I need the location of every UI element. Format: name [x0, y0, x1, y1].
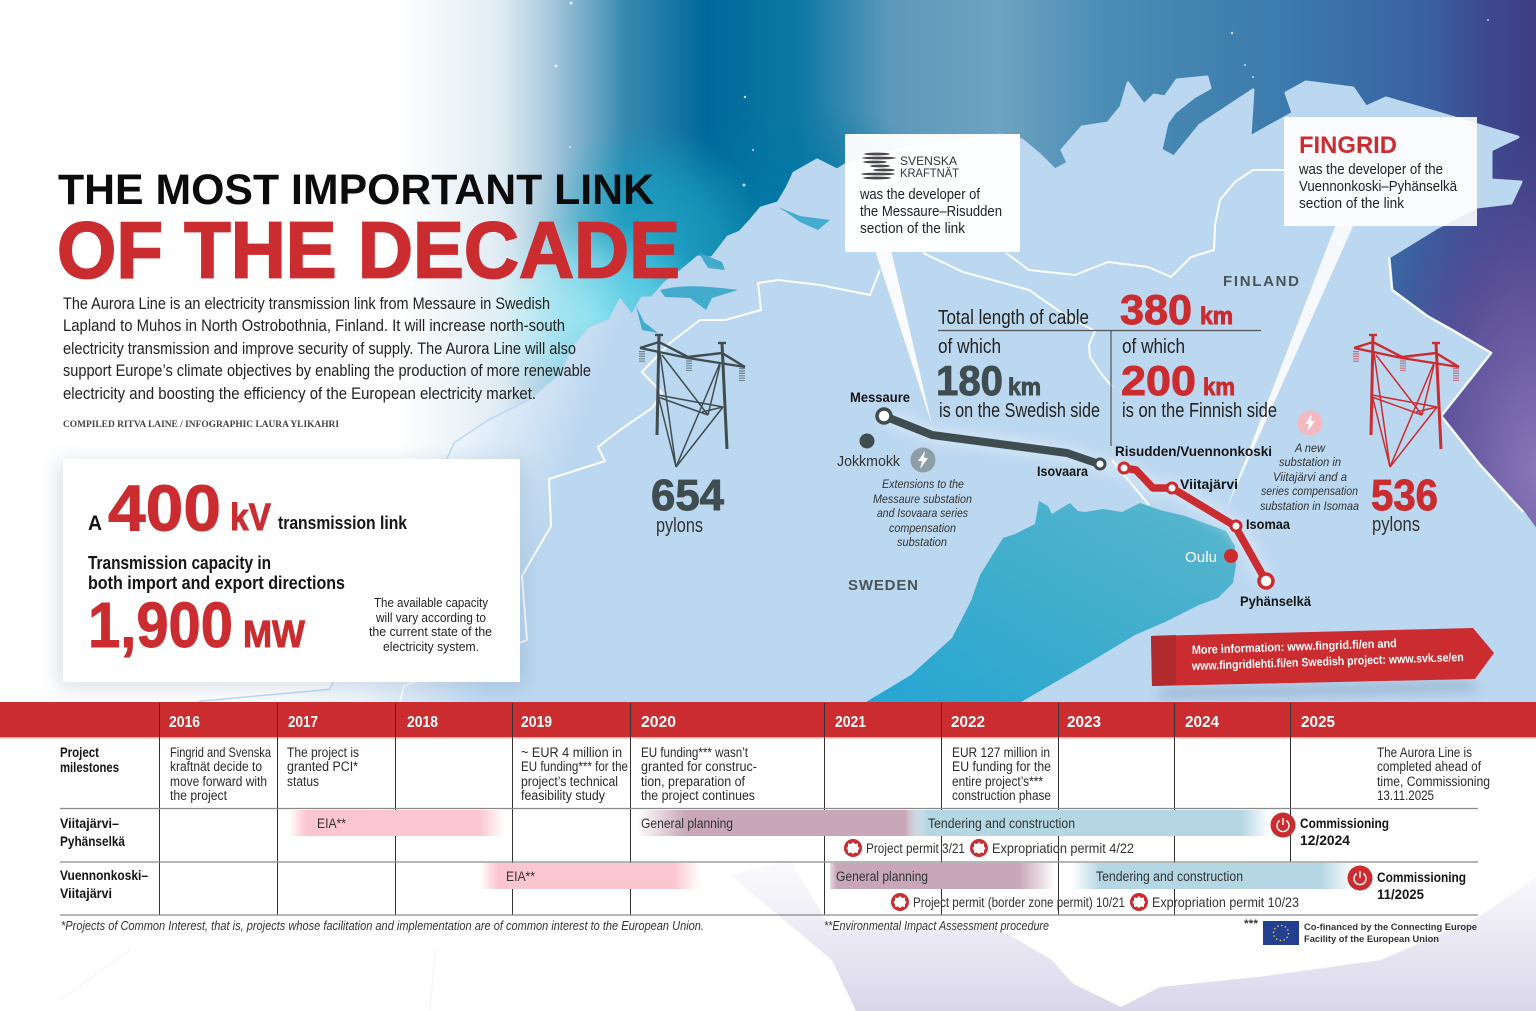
map: fjords: [636, 207, 830, 333]
timeline: row labels: Viitajärvi: [60, 885, 112, 901]
map: borders: [400, 170, 1523, 702]
milestones 2016: Fingrid and Svenska: [170, 745, 271, 760]
EU co-financing note: Co-financed by the Connecting Europe: [1304, 922, 1477, 933]
EU co-financing note: [1244, 918, 1477, 945]
map: land fade: [200, 298, 700, 702]
milestones 2016: the project: [170, 788, 227, 803]
intro text: electricity transmission and improve security of supply. The Aurora Line will also: [63, 340, 576, 358]
panel: key figures: 400: [108, 472, 221, 544]
commissioning: 11/2025: [1348, 866, 1466, 902]
cable length stats: km: [1203, 374, 1235, 401]
milestones 2020: granted for construc-: [641, 759, 757, 774]
icon: Finnish substation bolt: [1298, 410, 1322, 436]
panel: key figures: will vary according to: [375, 610, 486, 625]
milestones 2020: EU funding*** wasn’t: [641, 745, 748, 760]
logo: Svenska Kraftnät: SVENSKA: [900, 154, 957, 168]
panel: key figures: A: [88, 512, 102, 535]
milestones 2019: [521, 745, 628, 803]
commissioning: 11/2025: 11/2025: [1377, 886, 1424, 902]
map place names: Messaure: [850, 389, 910, 405]
map place names: Viitajärvi: [1180, 476, 1238, 492]
timeline: year header: 2022: [951, 714, 985, 731]
credit line: COMPILED RITVA LAINE / INFOGRAPHIC LAURA YLIKAHRI: [63, 420, 339, 430]
panel: key figures: kV: [230, 497, 272, 539]
milestones 2022: [952, 745, 1051, 803]
milestones 2019: project’s technical: [521, 774, 618, 789]
map place names: Oulu: [1185, 549, 1217, 566]
permits: Viitajärvi–Pyhänselkä: [844, 839, 1134, 857]
milestones 2017: status: [287, 774, 319, 789]
milestones 2025: 13.11.2025: [1377, 788, 1434, 803]
timeline: year header: 2021: [835, 714, 866, 731]
commissioning: 11/2025: Commissioning: [1377, 869, 1466, 885]
timeline: year header: 2025: [1301, 714, 1335, 731]
milestones 2022: EUR 127 million in: [952, 745, 1050, 760]
intro text: Lapland to Muhos in North Ostrobothnia, Finland. It will increase north-south: [63, 317, 565, 335]
EU co-financing note: ***: [1244, 918, 1259, 930]
panel: key figures: both import and export directions: [88, 573, 345, 593]
timeline: row labels: [60, 744, 148, 901]
cable length stats: km: [1200, 303, 1233, 330]
milestones 2025: The Aurora Line is: [1377, 745, 1472, 760]
note: Finnish substations: [1260, 441, 1359, 513]
note: Swedish substations: Messaure substation: [873, 492, 972, 506]
milestones 2019: ~ EUR 4 million in: [521, 745, 622, 760]
panel: key figures: transmission link: [278, 512, 408, 533]
callout: Fingrid: [1284, 117, 1477, 226]
commissioning: 12/2024: Commissioning: [1300, 815, 1389, 831]
panel: key figures: 1,900: [88, 589, 233, 661]
timeline: year header: 2020: [641, 714, 676, 731]
icon: Swedish pylon: [640, 335, 745, 467]
footnote: EIA: **Environmental Impact Assessment procedure: [824, 919, 1049, 933]
intro text: support Europe’s climate objectives by enabling the production of more renewable: [63, 362, 591, 380]
callout: Fingrid: Vuennonkoski–Pyhänselkä: [1299, 178, 1458, 195]
title: THE MOST IMPORTANT LINK: [58, 166, 654, 214]
stat: Finnish pylons: 536: [1371, 471, 1438, 520]
milestones 2025: completed ahead of: [1377, 759, 1481, 774]
commissioning: 12/2024: [1270, 812, 1389, 848]
cable length stats: is on the Finnish side: [1122, 400, 1277, 422]
logo: Svenska Kraftnät: [861, 153, 960, 180]
permits: Viitajärvi–Pyhänselkä: Expropriation permit 4/22: [992, 841, 1134, 856]
map: Gulf of Bothnia: [866, 501, 1236, 702]
intro text: [63, 295, 591, 403]
cable length stats: of which: [938, 336, 1001, 358]
permits: Viitajärvi–Pyhänselkä: Project permit 3/21: [866, 841, 965, 856]
route: Swedish section: [877, 409, 1105, 469]
milestones 2020: [641, 745, 757, 803]
note: Swedish substations: compensation: [889, 521, 956, 535]
Gantt: Viitajärvi–Pyhänselkä: Tendering and construction: [928, 816, 1075, 831]
cable length stats: 200: [1121, 357, 1196, 404]
timeline: year header: 2017: [288, 714, 318, 731]
map place names: Isovaara: [1037, 463, 1088, 479]
note: Finnish substations: substation in Isomaa: [1260, 499, 1359, 513]
note: Finnish substations: A new: [1294, 441, 1326, 455]
milestones 2019: feasibility study: [521, 788, 605, 803]
cable length stats: Total length of cable: [938, 307, 1089, 329]
ribbon: more information: More information: www.fingrid.fi/en and: [1192, 636, 1397, 657]
timeline: year header: 2016: [169, 714, 200, 731]
note: Finnish substations: substation in: [1279, 455, 1341, 469]
milestones 2025: time, Commissioning: [1377, 774, 1490, 789]
callout: Fingrid: section of the link: [1299, 195, 1404, 212]
map place names: Isomaa: [1246, 516, 1290, 532]
Gantt: Vuennonkoski–Viitajärvi: EIA**: [506, 869, 536, 884]
timeline: year header: 2023: [1067, 714, 1101, 731]
commissioning: 12/2024: 12/2024: [1300, 832, 1350, 848]
milestones 2017: [287, 745, 359, 789]
stat: Swedish pylons: pylons: [656, 515, 703, 537]
timeline: row labels: milestones: [60, 759, 119, 775]
permits: Vuennonkoski–Viitajärvi: Expropriation permit 10/23: [1152, 895, 1299, 910]
milestones 2017: granted PCI*: [287, 759, 359, 774]
panel: key figures: Transmission capacity in: [88, 553, 271, 573]
milestones 2016: move forward with: [170, 774, 267, 789]
note: Swedish substations: Extensions to the: [882, 477, 964, 491]
map place names: Pyhänselkä: [1240, 593, 1311, 609]
icon: EU flag: [1263, 921, 1299, 945]
ribbon: more information: www.fingridlehti.fi/en Swedish project: www.svk.se/en: [1191, 650, 1464, 673]
Gantt: Viitajärvi–Pyhänselkä: EIA**: [317, 816, 347, 831]
milestones 2019: EU funding*** for the: [521, 759, 628, 774]
logo: Svenska Kraftnät: KRAFTNÄT: [900, 166, 960, 180]
cable length stats: of which: [1122, 336, 1185, 358]
callout: Svenska Kraftnät: section of the link: [860, 220, 965, 237]
title: OF THE DECADE: [57, 206, 680, 294]
cable length stats: 180: [936, 357, 1003, 404]
map label: Sweden: SWEDEN: [848, 577, 918, 594]
panel: key figures: the current state of the: [369, 624, 492, 639]
cable length stats: 380: [1120, 286, 1192, 333]
timeline: row labels: Project: [60, 744, 99, 760]
route: Finnish section: [1119, 463, 1273, 588]
Gantt: Vuennonkoski–Viitajärvi: General planning: [836, 869, 928, 884]
panel: key figures: electricity system.: [383, 639, 479, 654]
Gantt: Vuennonkoski–Viitajärvi: Tendering and construction: [1096, 869, 1243, 884]
title: [57, 166, 680, 294]
cable length stats: km: [1008, 374, 1041, 401]
panel: key figures: [58, 459, 526, 688]
callout: Svenska Kraftnät: the Messaure–Risudden: [860, 203, 1002, 220]
Gantt: Viitajärvi–Pyhänselkä: [289, 810, 1270, 836]
callout: Fingrid: was the developer of the: [1298, 161, 1443, 178]
timeline: year header: [0, 702, 1536, 738]
timeline: row labels: Vuennonkoski–: [60, 867, 148, 883]
milestones 2022: entire project’s***: [952, 774, 1044, 789]
note: Swedish substations: and Isovaara series: [877, 506, 968, 520]
milestones 2025: [1377, 745, 1490, 803]
timeline: year header: 2024: [1185, 714, 1219, 731]
timeline: year header: 2019: [521, 714, 552, 731]
EU co-financing note: Facility of the European Union: [1304, 934, 1439, 945]
stat: Swedish pylons: 654: [651, 471, 725, 520]
permits: Vuennonkoski–Viitajärvi: Project permit (border zone permit) 10/21: [913, 895, 1125, 910]
map label: Finland: FINLAND: [1223, 273, 1299, 290]
map place names: [837, 389, 1311, 609]
cable length stats: [936, 286, 1277, 446]
map: land: [200, 77, 1536, 702]
milestones 2022: construction phase: [952, 788, 1051, 803]
callout: Fingrid: FINGRID: [1299, 132, 1397, 159]
permits: Vuennonkoski–Viitajärvi: [891, 893, 1299, 911]
footnote: PCI: *Projects of Common Interest, that is, projects whose facilitation and implementation are of common interest to the European Union.: [61, 919, 704, 933]
timeline: row labels: Pyhänselkä: [60, 833, 125, 849]
Gantt: Vuennonkoski–Viitajärvi: [480, 863, 1355, 889]
timeline: row labels: Viitajärvi–: [60, 815, 119, 831]
stat: Finnish pylons: pylons: [1372, 514, 1420, 536]
icon: Swedish substation bolt: [910, 448, 936, 472]
callout: Svenska Kraftnät: was the developer of: [859, 186, 981, 203]
callout: Svenska Kraftnät: [845, 134, 1020, 252]
callout pointers: [875, 224, 1354, 510]
map place names: Risudden/Vuennonkoski: [1115, 443, 1272, 459]
panel: key figures: The available capacity: [374, 595, 488, 610]
note: Swedish substations: substation: [897, 535, 947, 549]
route glow: [884, 416, 1266, 581]
note: Finnish substations: series compensation: [1261, 484, 1358, 498]
timeline: year header: 2018: [407, 714, 438, 731]
intro text: electricity and boosting the efficiency of the European electricity market.: [63, 385, 536, 403]
cable length stats: is on the Swedish side: [939, 400, 1100, 422]
milestones 2022: EU funding for the: [952, 759, 1051, 774]
intro text: The Aurora Line is an electricity transmission link from Messaure in Swedish: [63, 295, 550, 313]
Gantt: Viitajärvi–Pyhänselkä: General planning: [641, 816, 733, 831]
ribbon: more information: [1151, 628, 1494, 698]
panel: key figures: MW: [243, 614, 305, 656]
milestones 2017: The project is: [287, 745, 359, 760]
map place names: Jokkmokk: [837, 453, 900, 470]
milestones 2020: the project continues: [641, 788, 755, 803]
timeline background: [0, 702, 1536, 1011]
icon: Finnish pylon: [1354, 335, 1459, 467]
milestones 2020: tion, preparation of: [641, 774, 745, 789]
milestones 2016: [170, 745, 271, 803]
note: Finnish substations: Viitajärvi and a: [1273, 470, 1347, 484]
milestones 2016: kraftnät decide to: [170, 759, 262, 774]
note: Swedish substations: [873, 477, 972, 549]
